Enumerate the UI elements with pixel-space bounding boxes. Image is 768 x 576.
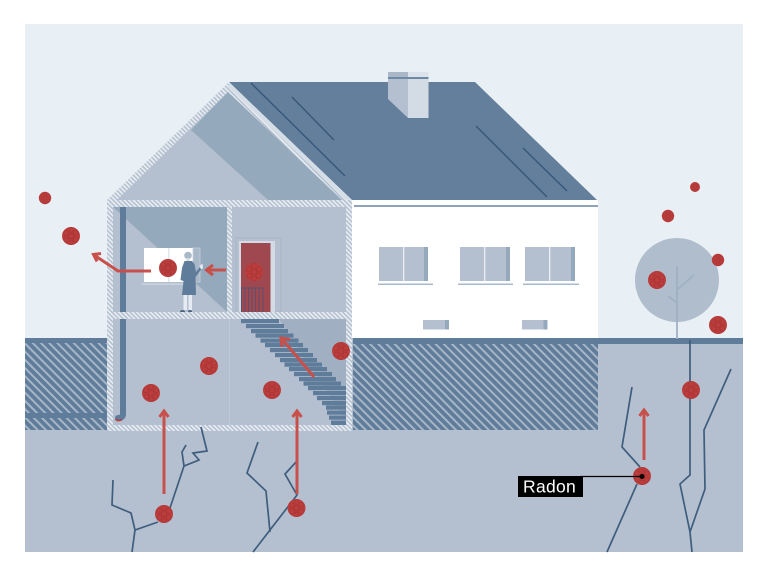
- callout: Radon label: [518, 474, 644, 497]
- crack: left: [112, 427, 207, 552]
- white house section: [352, 200, 598, 338]
- basement: [113, 319, 346, 425]
- crack: right: [680, 340, 731, 552]
- radon particles: [39, 182, 727, 523]
- ground: [25, 338, 743, 552]
- gable: [107, 83, 352, 200]
- floor slab: [107, 312, 352, 319]
- vent 1: [423, 320, 449, 330]
- window 1: [378, 247, 433, 285]
- stairs: [241, 319, 346, 425]
- house walls: [107, 200, 352, 431]
- roof: [229, 82, 597, 200]
- arrow: into the living room: [206, 265, 226, 275]
- right room: [232, 207, 346, 312]
- arrow: rising centre: [292, 411, 302, 494]
- window 2: [458, 247, 513, 285]
- callout: Radon label: Radon: [523, 476, 576, 496]
- left hatched soil: [25, 338, 107, 430]
- crack: centre left: [247, 442, 297, 552]
- arrow: out through the window: [94, 254, 151, 271]
- arrow: rising left: [160, 411, 168, 494]
- crack: centre right: [607, 387, 640, 552]
- door: [236, 238, 281, 312]
- vent 2: [522, 320, 548, 330]
- right hatched soil: [353, 344, 598, 430]
- tree: [635, 238, 719, 339]
- drain pipe: [116, 207, 126, 421]
- woman figure: [180, 252, 203, 313]
- left room: [113, 207, 227, 312]
- ground surface band: [353, 338, 743, 344]
- arrow: rising right: [640, 410, 648, 460]
- chimney: [388, 72, 428, 118]
- arrow: up the stairs: [281, 338, 314, 377]
- living room window: [141, 248, 200, 285]
- window 3: [523, 247, 579, 285]
